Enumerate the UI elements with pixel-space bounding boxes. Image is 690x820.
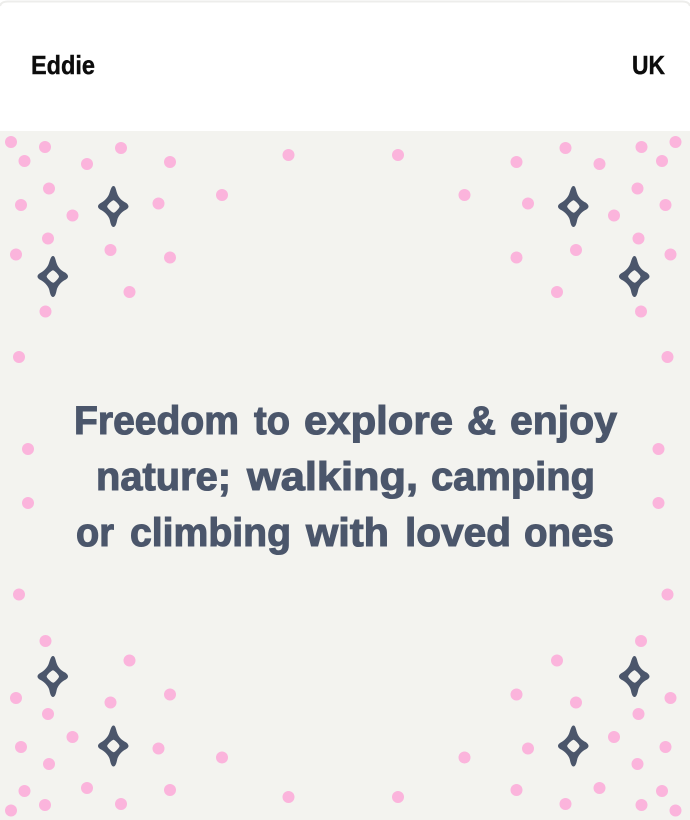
main statement: climbing <box>130 511 291 555</box>
country: UK <box>632 50 665 80</box>
main statement: loved <box>405 511 511 555</box>
header bar <box>0 0 690 131</box>
main statement: to <box>254 399 290 443</box>
main statement: camping <box>431 455 595 499</box>
main statement: walking, <box>246 455 418 499</box>
main statement: ones <box>524 511 614 555</box>
main statement: Freedom <box>74 399 239 443</box>
main statement: & <box>467 399 496 443</box>
main statement: with <box>305 511 389 555</box>
main statement: nature; <box>96 455 231 499</box>
main statement: explore <box>304 399 453 443</box>
name: Eddie <box>31 50 95 80</box>
sparkle stars <box>38 186 650 766</box>
main statement: or <box>76 511 114 555</box>
main statement: enjoy <box>510 399 618 443</box>
main statement <box>74 399 618 555</box>
